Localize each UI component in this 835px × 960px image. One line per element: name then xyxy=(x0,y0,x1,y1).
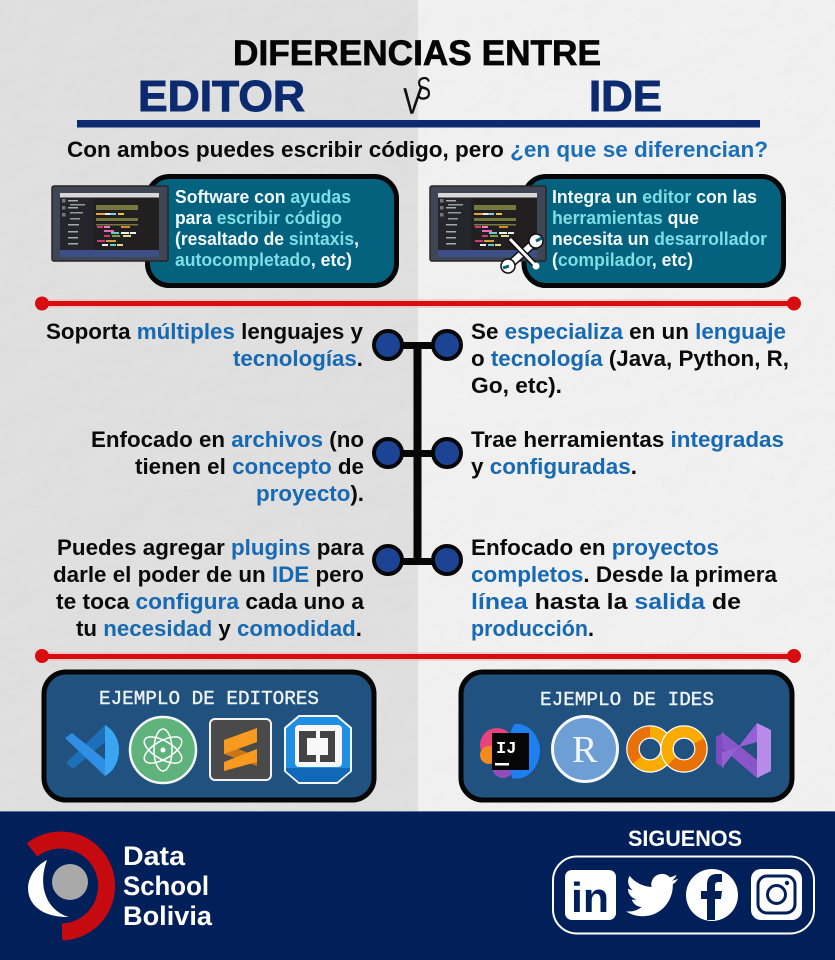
ide definition text: herramientas que xyxy=(552,208,699,228)
trait: specialised: o tecnología (Java, Python, R, xyxy=(471,346,789,371)
editor definition text xyxy=(175,187,359,270)
brand name xyxy=(123,841,213,931)
panel: ide definition xyxy=(430,176,784,286)
trait: specialised: Se especializa en un lenguaje xyxy=(471,319,786,344)
trait: plugins: te toca configura cada uno a xyxy=(56,589,364,614)
trait: integrated tools: Trae herramientas integradas xyxy=(471,427,784,452)
heading: ide examples: EJEMPLO DE IDES xyxy=(540,689,714,711)
editor traits column xyxy=(46,319,364,641)
trait: specialised xyxy=(471,319,789,398)
ide definition text: (compilador, etc) xyxy=(552,250,693,270)
trait: files: proyecto). xyxy=(256,481,364,506)
timeline connector xyxy=(374,331,461,574)
icon: facebook xyxy=(686,869,738,921)
subtitle: Con ambos puedes escribir código, pero ¿en que se diferencian? xyxy=(67,137,768,162)
icon: brackets xyxy=(285,716,351,783)
icon: intellij: IJ xyxy=(496,740,516,759)
icon: sublime text xyxy=(210,719,271,780)
icon: instagram xyxy=(751,869,802,920)
brand name: Bolivia xyxy=(123,901,213,931)
trait: files: Enfocado en archivos (no xyxy=(91,427,364,452)
trait: full projects: completos. Desde la primera xyxy=(471,562,777,587)
trait: plugins: darle el poder de un IDE pero xyxy=(53,562,364,587)
icon: linkedin: in xyxy=(571,874,609,921)
trait: integrated tools: y configuradas. xyxy=(471,454,637,479)
trait: full projects: producción. xyxy=(471,616,594,641)
ide traits column xyxy=(471,319,789,641)
heading: editor: EDITOR xyxy=(138,72,305,121)
editor definition text: (resaltado de sintaxis, xyxy=(175,229,359,249)
trait: plugins xyxy=(53,535,364,641)
red divider top xyxy=(35,296,801,310)
footer band xyxy=(0,811,835,960)
ide definition text: Integra un editor con las xyxy=(552,187,757,207)
icon: code editor window xyxy=(52,186,168,261)
trait: full projects: línea hasta la salida de xyxy=(471,589,741,614)
icon: google colab xyxy=(633,732,701,766)
panel: social links xyxy=(553,856,814,934)
icon: visual studio xyxy=(716,723,771,778)
editor definition text: autocompletado, etc) xyxy=(175,250,352,270)
vs mark: S xyxy=(414,70,433,107)
icon: rstudio: R xyxy=(572,729,598,771)
heading: follow us: SIGUENOS xyxy=(628,826,742,851)
panel: editor examples xyxy=(44,672,374,800)
trait: full projects xyxy=(471,535,777,641)
editor definition text: para escribir código xyxy=(175,208,342,228)
heading: editor examples: EJEMPLO DE EDITORES xyxy=(99,688,319,710)
title underline xyxy=(77,120,760,128)
trait: plugins: Puedes agregar plugins para xyxy=(57,535,364,560)
icon: vs code xyxy=(65,725,119,776)
panel: ide examples xyxy=(461,672,792,800)
vs mark: V xyxy=(400,79,427,124)
icon: atom xyxy=(130,717,196,783)
trait: full projects: Enfocado en proyectos xyxy=(471,535,719,560)
trait: files: tienen el concepto de xyxy=(135,454,364,479)
icon: intellij xyxy=(480,724,540,779)
trait: languages: Soporta múltiples lenguajes y xyxy=(46,319,363,344)
trait: files xyxy=(91,427,364,506)
icon: twitter xyxy=(626,874,678,916)
vs mark xyxy=(399,70,434,124)
trait: specialised: Go, etc). xyxy=(471,373,562,398)
panel: editor definition xyxy=(52,176,396,286)
icon: ide window with tools xyxy=(430,186,546,273)
brand name: School xyxy=(123,871,209,901)
trait: integrated tools xyxy=(471,427,784,479)
logo: data school bolivia xyxy=(28,840,213,932)
icon: linkedin xyxy=(565,870,616,921)
editor definition text: Software con ayudas xyxy=(175,187,351,207)
trait: plugins: tu necesidad y comodidad. xyxy=(76,616,362,641)
trait: languages: tecnologías. xyxy=(233,346,363,371)
heading: ide: IDE xyxy=(589,72,662,121)
ide definition text: necesita un desarrollador xyxy=(552,229,767,249)
ide definition text xyxy=(552,187,767,270)
title: DIFERENCIAS ENTRE xyxy=(233,34,601,73)
red divider bottom xyxy=(35,649,801,663)
trait: languages xyxy=(46,319,363,371)
brand name: Data xyxy=(123,841,186,871)
icon: rstudio xyxy=(552,716,618,782)
